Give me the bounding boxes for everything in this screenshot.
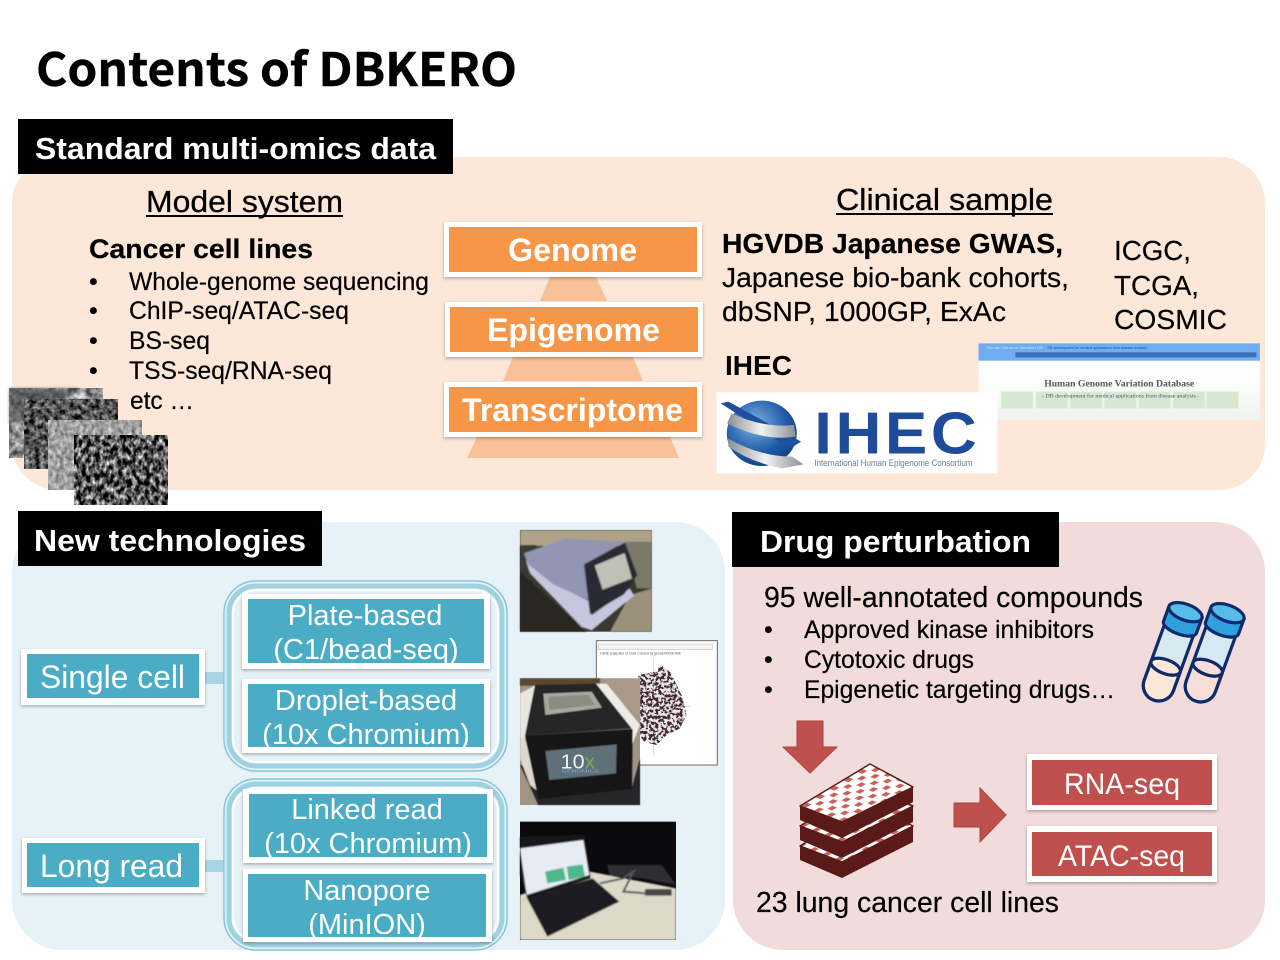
arrow: right — [954, 788, 1006, 842]
plate: middle — [800, 784, 913, 858]
icon: test tubes — [1137, 599, 1247, 707]
text block: cancer cell lines: ChIP-seq/ATAC-seq — [129, 297, 349, 325]
box: plate-based: Plate-based — [288, 600, 442, 632]
text block: compounds — [764, 582, 1143, 704]
text block: ICGC TCGA COSMIC: TCGA, — [1114, 270, 1199, 301]
box: linked read: (10x Chromium) — [264, 828, 472, 860]
image: HGVD website screenshot: - DB development for medical applications from disease analysis - — [1042, 393, 1200, 400]
arrow: down — [783, 721, 837, 773]
box: RNA-seq — [1027, 754, 1217, 810]
box: single cell — [21, 649, 205, 705]
box: transcriptome — [444, 382, 702, 437]
box: linked read: Linked read — [291, 794, 443, 826]
box: droplet-based: Droplet-based — [275, 685, 457, 717]
box: nanopore — [243, 869, 492, 942]
pyramid diagram: omics layers — [444, 222, 703, 458]
box: nanopore: Nanopore — [303, 875, 431, 907]
heading: standard multi-omics data: Standard multi-omics data — [35, 131, 437, 166]
group: long read methods — [224, 779, 507, 950]
logo: IHEC: IHEC — [814, 400, 977, 467]
text block: compounds: Cytotoxic drugs — [804, 646, 974, 674]
text block: compounds: • — [764, 616, 773, 644]
text block: compounds: Approved kinase inhibitors — [804, 616, 1094, 644]
heading: standard multi-omics data — [18, 119, 453, 174]
text block: genome cohorts: dbSNP, 1000GP, ExAc — [722, 296, 1006, 327]
image: HGVD website screenshot: DB development for medical applications from disease analysis — [1047, 346, 1147, 350]
text block: ICGC TCGA COSMIC: COSMIC — [1114, 304, 1227, 335]
text block: cancer cell lines: Whole-genome sequencing — [129, 268, 429, 296]
image: 10x instrument photo — [520, 678, 640, 805]
icon: test tube left — [1137, 599, 1205, 706]
text block: cancer cell lines: • — [89, 297, 98, 325]
text block: compounds: 95 well-annotated compounds — [764, 582, 1143, 614]
text block: genome cohorts: Japanese bio-bank cohorts, — [722, 262, 1069, 293]
image: laptop and MinION photo — [520, 822, 676, 940]
text block: ICGC TCGA COSMIC — [1114, 235, 1227, 335]
box: droplet-based — [242, 679, 490, 753]
box: genome: Genome — [508, 232, 637, 268]
text block: cancer cell lines: BS-seq — [129, 327, 210, 355]
panel: standard multi-omics data — [9, 119, 1265, 505]
image: HGVD website screenshot: Human Genome Variation Database — [1044, 380, 1194, 390]
text block: genome cohorts: HGVDB Japanese GWAS, — [722, 228, 1063, 259]
label: IHEC: IHEC — [725, 350, 792, 381]
text: cell lines: 23 lung cancer cell lines — [756, 887, 1059, 919]
heading: new technologies: New technologies — [34, 523, 306, 558]
box: epigenome — [445, 302, 703, 357]
plate: bottom — [800, 804, 913, 878]
heading: drug perturbation — [732, 512, 1059, 567]
text block: compounds: • — [764, 646, 773, 674]
logo: IHEC: International Human Epigenome Consortium — [814, 458, 973, 468]
text block: cancer cell lines: • — [89, 327, 98, 355]
icon: stacked well plates — [800, 764, 913, 878]
box: plate-based: (C1/bead-seq) — [273, 634, 459, 666]
icon: test tube right — [1179, 600, 1247, 707]
text block: compounds: Epigenetic targeting drugs… — [804, 676, 1115, 704]
text block: genome cohorts — [722, 228, 1069, 327]
heading: new technologies — [18, 511, 322, 566]
box: transcriptome: Transcriptome — [462, 392, 683, 428]
image: 10x instrument photo: x — [585, 750, 596, 773]
box: plate-based — [242, 594, 490, 669]
connector: long read — [205, 860, 231, 872]
panel: new technologies — [12, 511, 725, 950]
text block: ICGC TCGA COSMIC: ICGC, — [1114, 235, 1191, 266]
text block: cancer cell lines — [89, 234, 429, 415]
connector: single cell — [205, 672, 231, 684]
box: long read — [22, 838, 205, 893]
text block: cancer cell lines: • — [89, 357, 98, 385]
image: cell micrographs — [9, 388, 168, 505]
image: HGVD website screenshot: Human Genome Variation DB — [987, 345, 1043, 350]
image: 10x instrument photo: 10 — [561, 750, 585, 773]
image: t-SNE plot — [596, 641, 717, 765]
heading: drug perturbation: Drug perturbation — [760, 524, 1031, 559]
logo: IHEC — [716, 392, 997, 473]
heading: model system: Model system — [146, 184, 343, 219]
box: ATAC-seq: ATAC-seq — [1058, 840, 1185, 873]
text block: compounds: • — [764, 676, 773, 704]
text block: cancer cell lines: • — [89, 268, 98, 296]
box: droplet-based: (10x Chromium) — [262, 719, 470, 751]
box: epigenome: Epigenome — [487, 312, 660, 348]
image: C1 instrument photo — [520, 530, 652, 632]
text block: cancer cell lines: TSS-seq/RNA-seq — [129, 357, 332, 385]
text block: cancer cell lines: Cancer cell lines — [89, 234, 313, 264]
text block: cancer cell lines: etc … — [130, 387, 194, 415]
box: nanopore: (MinION) — [308, 909, 426, 941]
panel: drug perturbation — [732, 512, 1265, 950]
image: t-SNE plot: t-SNE projection of Cells Colored by geneEXHOSOME — [600, 652, 682, 656]
heading: clinical sample: Clinical sample — [836, 182, 1053, 217]
box: ATAC-seq — [1027, 826, 1217, 882]
box: single cell: Single cell — [40, 659, 185, 695]
box: linked read — [243, 789, 493, 863]
group: single cell methods — [224, 581, 507, 771]
image: 10x instrument photo: GENOMICS — [562, 769, 600, 775]
image: HGVD website screenshot — [979, 343, 1260, 420]
title: Contents of DBKERO — [36, 34, 517, 100]
box: genome — [444, 222, 702, 277]
box: RNA-seq: RNA-seq — [1064, 768, 1180, 801]
box: long read: Long read — [40, 848, 183, 884]
plate: top — [800, 764, 913, 838]
